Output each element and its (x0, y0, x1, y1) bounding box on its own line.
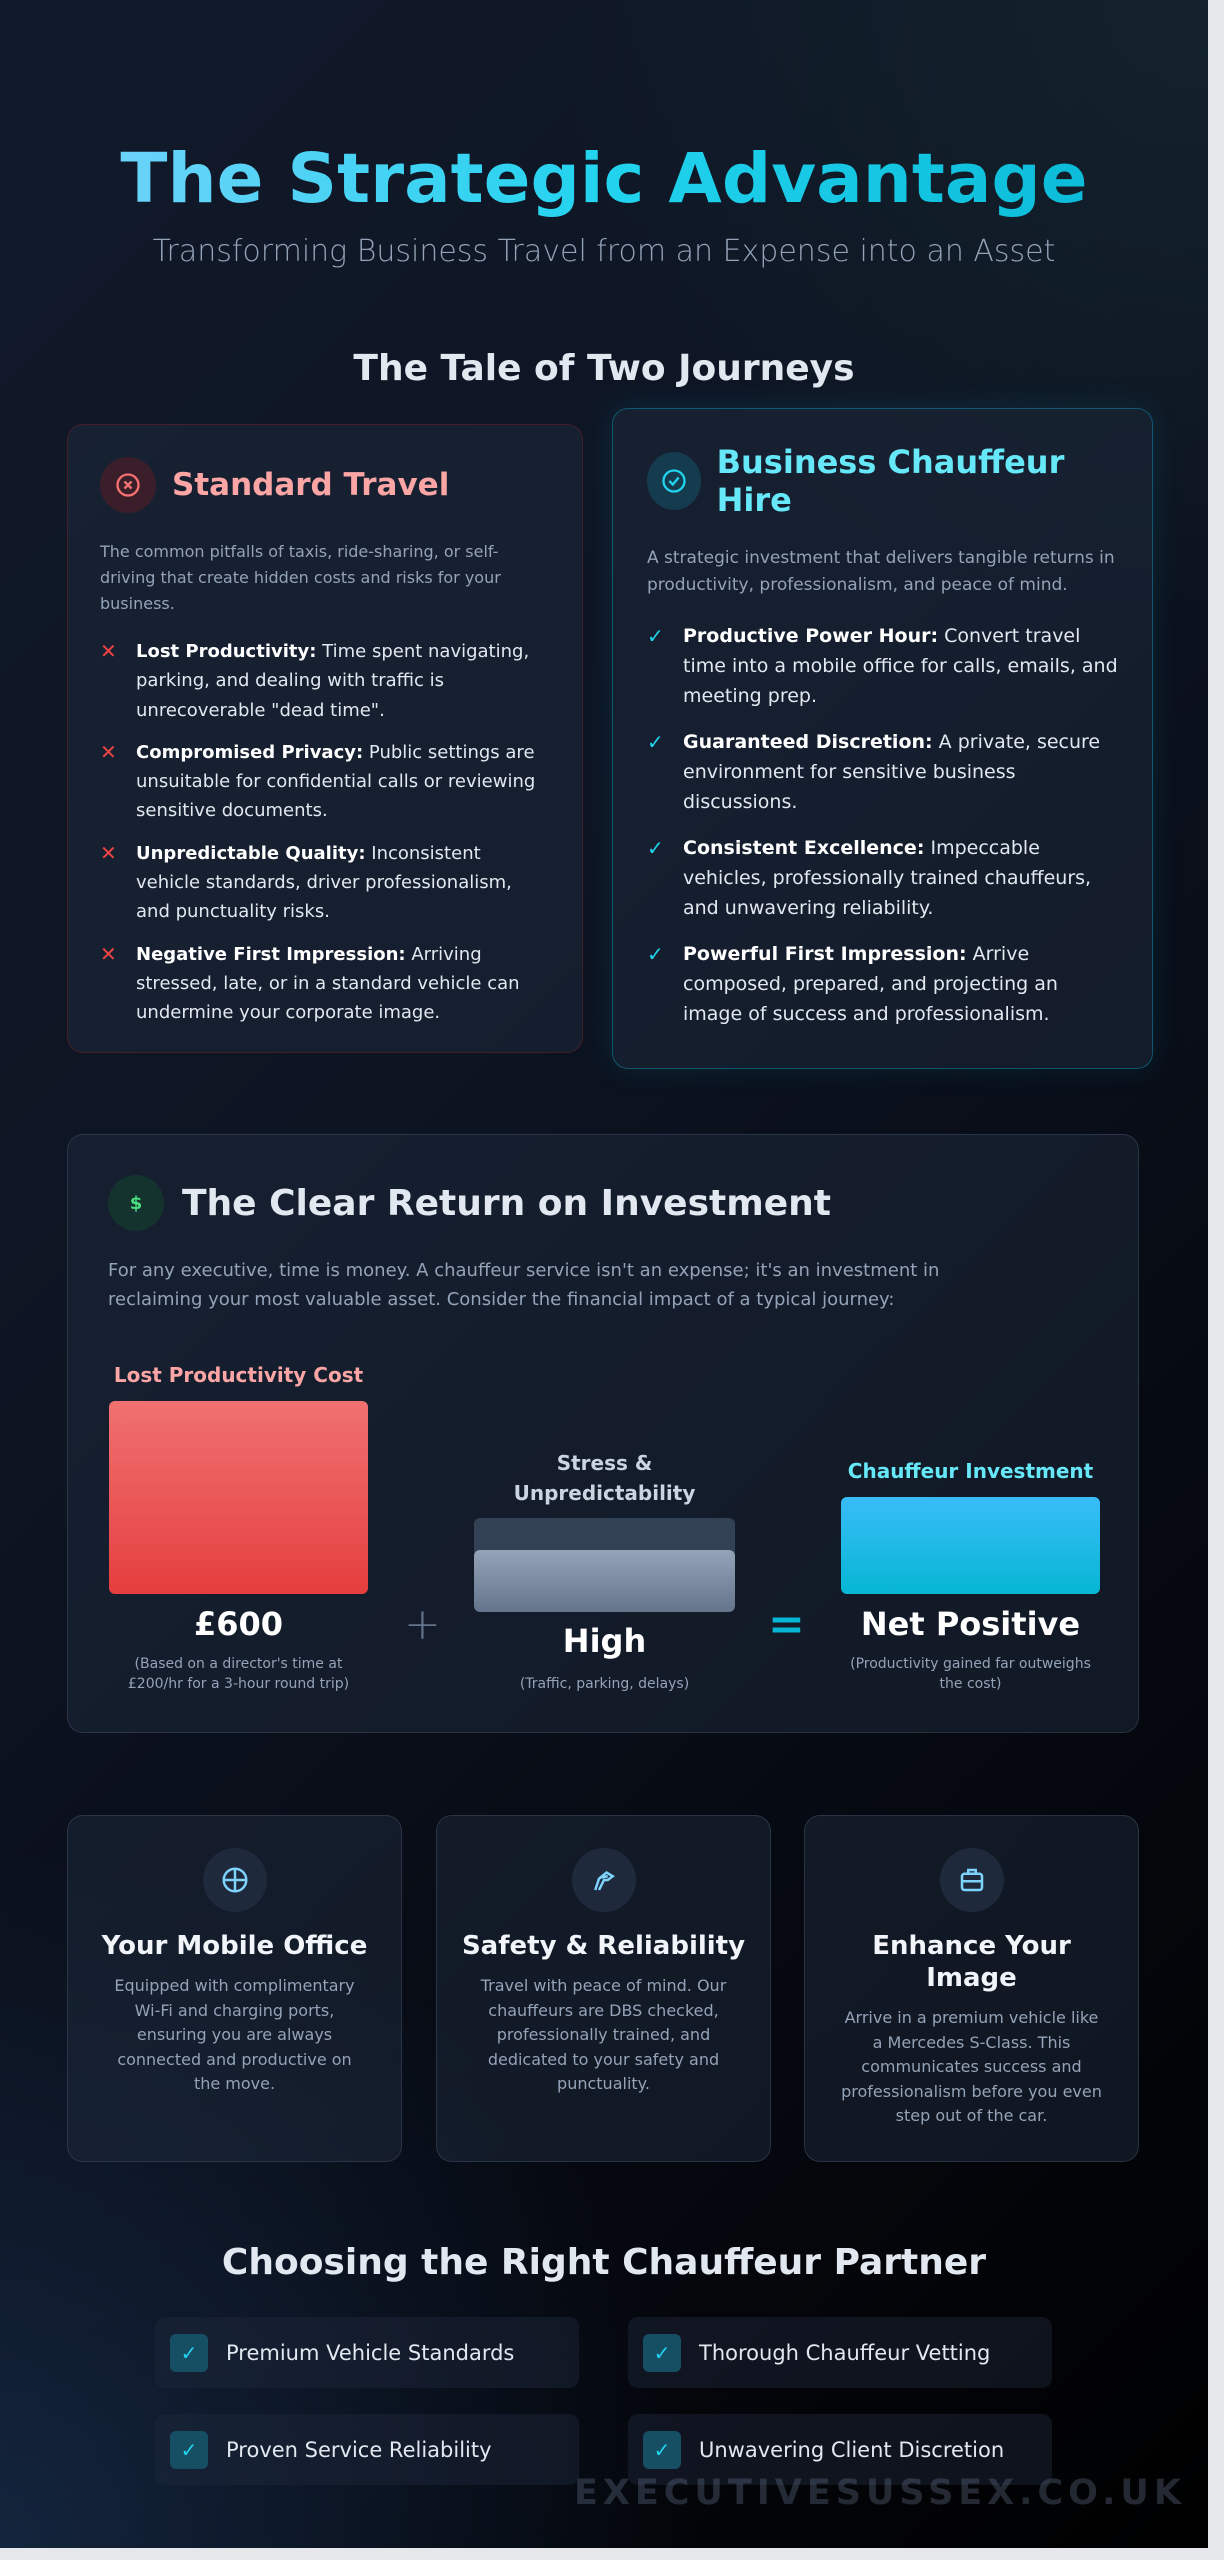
checklist item: premium vehicle (155, 2317, 579, 2388)
feature card: safety: Safety & Reliability (462, 1931, 745, 1961)
feature card: safety: Travel with peace of mind. Our chauffeurs are DBS checked, professionally trained, and dedicated to your safety and punctuality. (481, 1976, 726, 2093)
chauffeur list: Guaranteed Discretion: A private, secure environment for sensitive business discussions. (683, 731, 1100, 813)
equals sign: = (768, 1599, 805, 1650)
standard travel header (100, 457, 449, 513)
roi header: The Clear Return on Investment (182, 1182, 831, 1224)
panel: return on investment (67, 1134, 1139, 1733)
panel: business chauffeur hire (612, 408, 1153, 1069)
checklist item: reliability: Proven Service Reliability (226, 2438, 492, 2462)
feature card: image (804, 1815, 1139, 2162)
standard travel header: Standard Travel (172, 467, 449, 503)
icon: briefcase (940, 1848, 1004, 1912)
checklist item: premium vehicle: Premium Vehicle Standards (226, 2340, 514, 2364)
watermark: EXECUTIVESUSSEX.CO.UK (574, 2473, 1186, 2513)
icon: check circle (647, 452, 701, 510)
chauffeur header: Business Chauffeur Hire (717, 443, 1064, 519)
standard travel list: ✕ (100, 740, 117, 764)
standard travel list: Compromised Privacy: Public settings are unsuitable for confidential calls or reviewing sensitive documents. (136, 742, 535, 821)
feature card: image: Arrive in a premium vehicle like a Mercedes S-Class. This communicates success and professionalism before you even step out of the car. (841, 2008, 1102, 2125)
chart: stress: (Traffic, parking, delays) (520, 1676, 689, 1692)
chauffeur list: ✓ (647, 624, 664, 648)
standard travel description: The common pitfalls of taxis, ride-sharing, or self-driving that create hidden costs and risks for your business. (100, 542, 501, 613)
standard travel list: ✕ (100, 942, 117, 966)
checklist item: discretion: Unwavering Client Discretion (699, 2438, 1004, 2462)
chauffeur list: ✓ (647, 942, 664, 966)
chart: chauffeur investment (841, 1459, 1100, 1692)
checklist item: discretion: ✓ (654, 2438, 670, 2462)
checklist item: vetting: Thorough Chauffeur Vetting (699, 2340, 990, 2364)
icon: globe (202, 1848, 266, 1912)
subtitle: Transforming Business Travel from an Expense into an Asset (153, 234, 1055, 269)
feature card: mobile office: Equipped with complimentary Wi-Fi and charging ports, ensuring you are always connected and productive on the move. (114, 1976, 355, 2093)
standard travel list: ✕ (100, 841, 117, 865)
feature card: safety (436, 1815, 771, 2162)
heading: tale of two journeys: The Tale of Two Journeys (353, 348, 855, 389)
chart: lost productivity: £200/hr for a 3-hour round trip) (128, 1676, 349, 1692)
chart: lost productivity (109, 1363, 368, 1692)
icon: x circle (100, 457, 156, 513)
checklist item: discretion (628, 2414, 1052, 2485)
chart: stress: Stress & (557, 1451, 652, 1475)
chart: stress (474, 1451, 735, 1692)
chauffeur list: Consistent Excellence: Impeccable vehicles, professionally trained chauffeurs, and unwavering reliability. (683, 837, 1091, 919)
checklist item: reliability (155, 2414, 579, 2485)
roi paragraph: For any executive, time is money. A chauffeur service isn't an expense; it's an investment in reclaiming your most valuable asset. Consider the financial impact of a typical journey: (108, 1260, 939, 1310)
chauffeur list: ✓ (647, 836, 664, 860)
standard travel list: Lost Productivity: Time spent navigating, parking, and dealing with traffic is unrecoverable "dead time". (136, 641, 529, 721)
roi header (108, 1175, 831, 1231)
chart: chauffeur investment: the cost) (940, 1676, 1001, 1692)
icon: dollar: $ (130, 1192, 142, 1214)
standard travel list (100, 639, 535, 1023)
title: The Strategic Advantage (120, 139, 1088, 219)
icon: dollar (108, 1175, 164, 1231)
feature card: mobile office: Your Mobile Office (102, 1931, 367, 1961)
chauffeur list: Powerful First Impression: Arrive composed, prepared, and projecting an image of success and professionalism. (683, 943, 1058, 1025)
chart: stress: Unpredictability (514, 1481, 695, 1505)
chart: chauffeur investment: (Productivity gained far outweighs (850, 1656, 1091, 1672)
chart: lost productivity: £600 (194, 1605, 283, 1643)
chauffeur list (647, 624, 1118, 1025)
checklist item: reliability: ✓ (181, 2438, 197, 2462)
checklist item: vetting (628, 2317, 1052, 2388)
checklist item: premium vehicle: ✓ (181, 2340, 197, 2364)
heading: choosing partner: Choosing the Right Chauffeur Partner (222, 2242, 986, 2283)
chart: chauffeur investment: Chauffeur Investment (848, 1459, 1093, 1483)
feature card: image: Image (926, 1963, 1017, 1993)
standard travel list: Unpredictable Quality: Inconsistent vehicle standards, driver professionalism, and punctuality risks. (136, 843, 512, 922)
standard travel list: ✕ (100, 639, 117, 663)
chart: stress: High (563, 1622, 646, 1660)
chauffeur description: A strategic investment that delivers tangible returns in productivity, professionalism, and peace of mind. (647, 548, 1115, 595)
chart: chauffeur investment: Net Positive (861, 1605, 1080, 1643)
chart: lost productivity: (Based on a director's time at (135, 1656, 342, 1672)
chauffeur list: Productive Power Hour: Convert travel time into a mobile office for calls, emails, and meeting prep. (683, 625, 1118, 707)
standard travel list: Negative First Impression: Arriving stressed, late, or in a standard vehicle can undermine your corporate image. (136, 944, 520, 1023)
feature card: mobile office (67, 1815, 402, 2162)
plus sign: + (404, 1599, 441, 1650)
checklist item: vetting: ✓ (654, 2340, 670, 2364)
panel: standard travel (67, 424, 583, 1053)
feature card: image: Enhance Your (872, 1931, 1071, 1961)
chauffeur list: ✓ (647, 730, 664, 754)
chart: lost productivity: Lost Productivity Cost (114, 1363, 363, 1387)
icon: hand (572, 1848, 636, 1912)
